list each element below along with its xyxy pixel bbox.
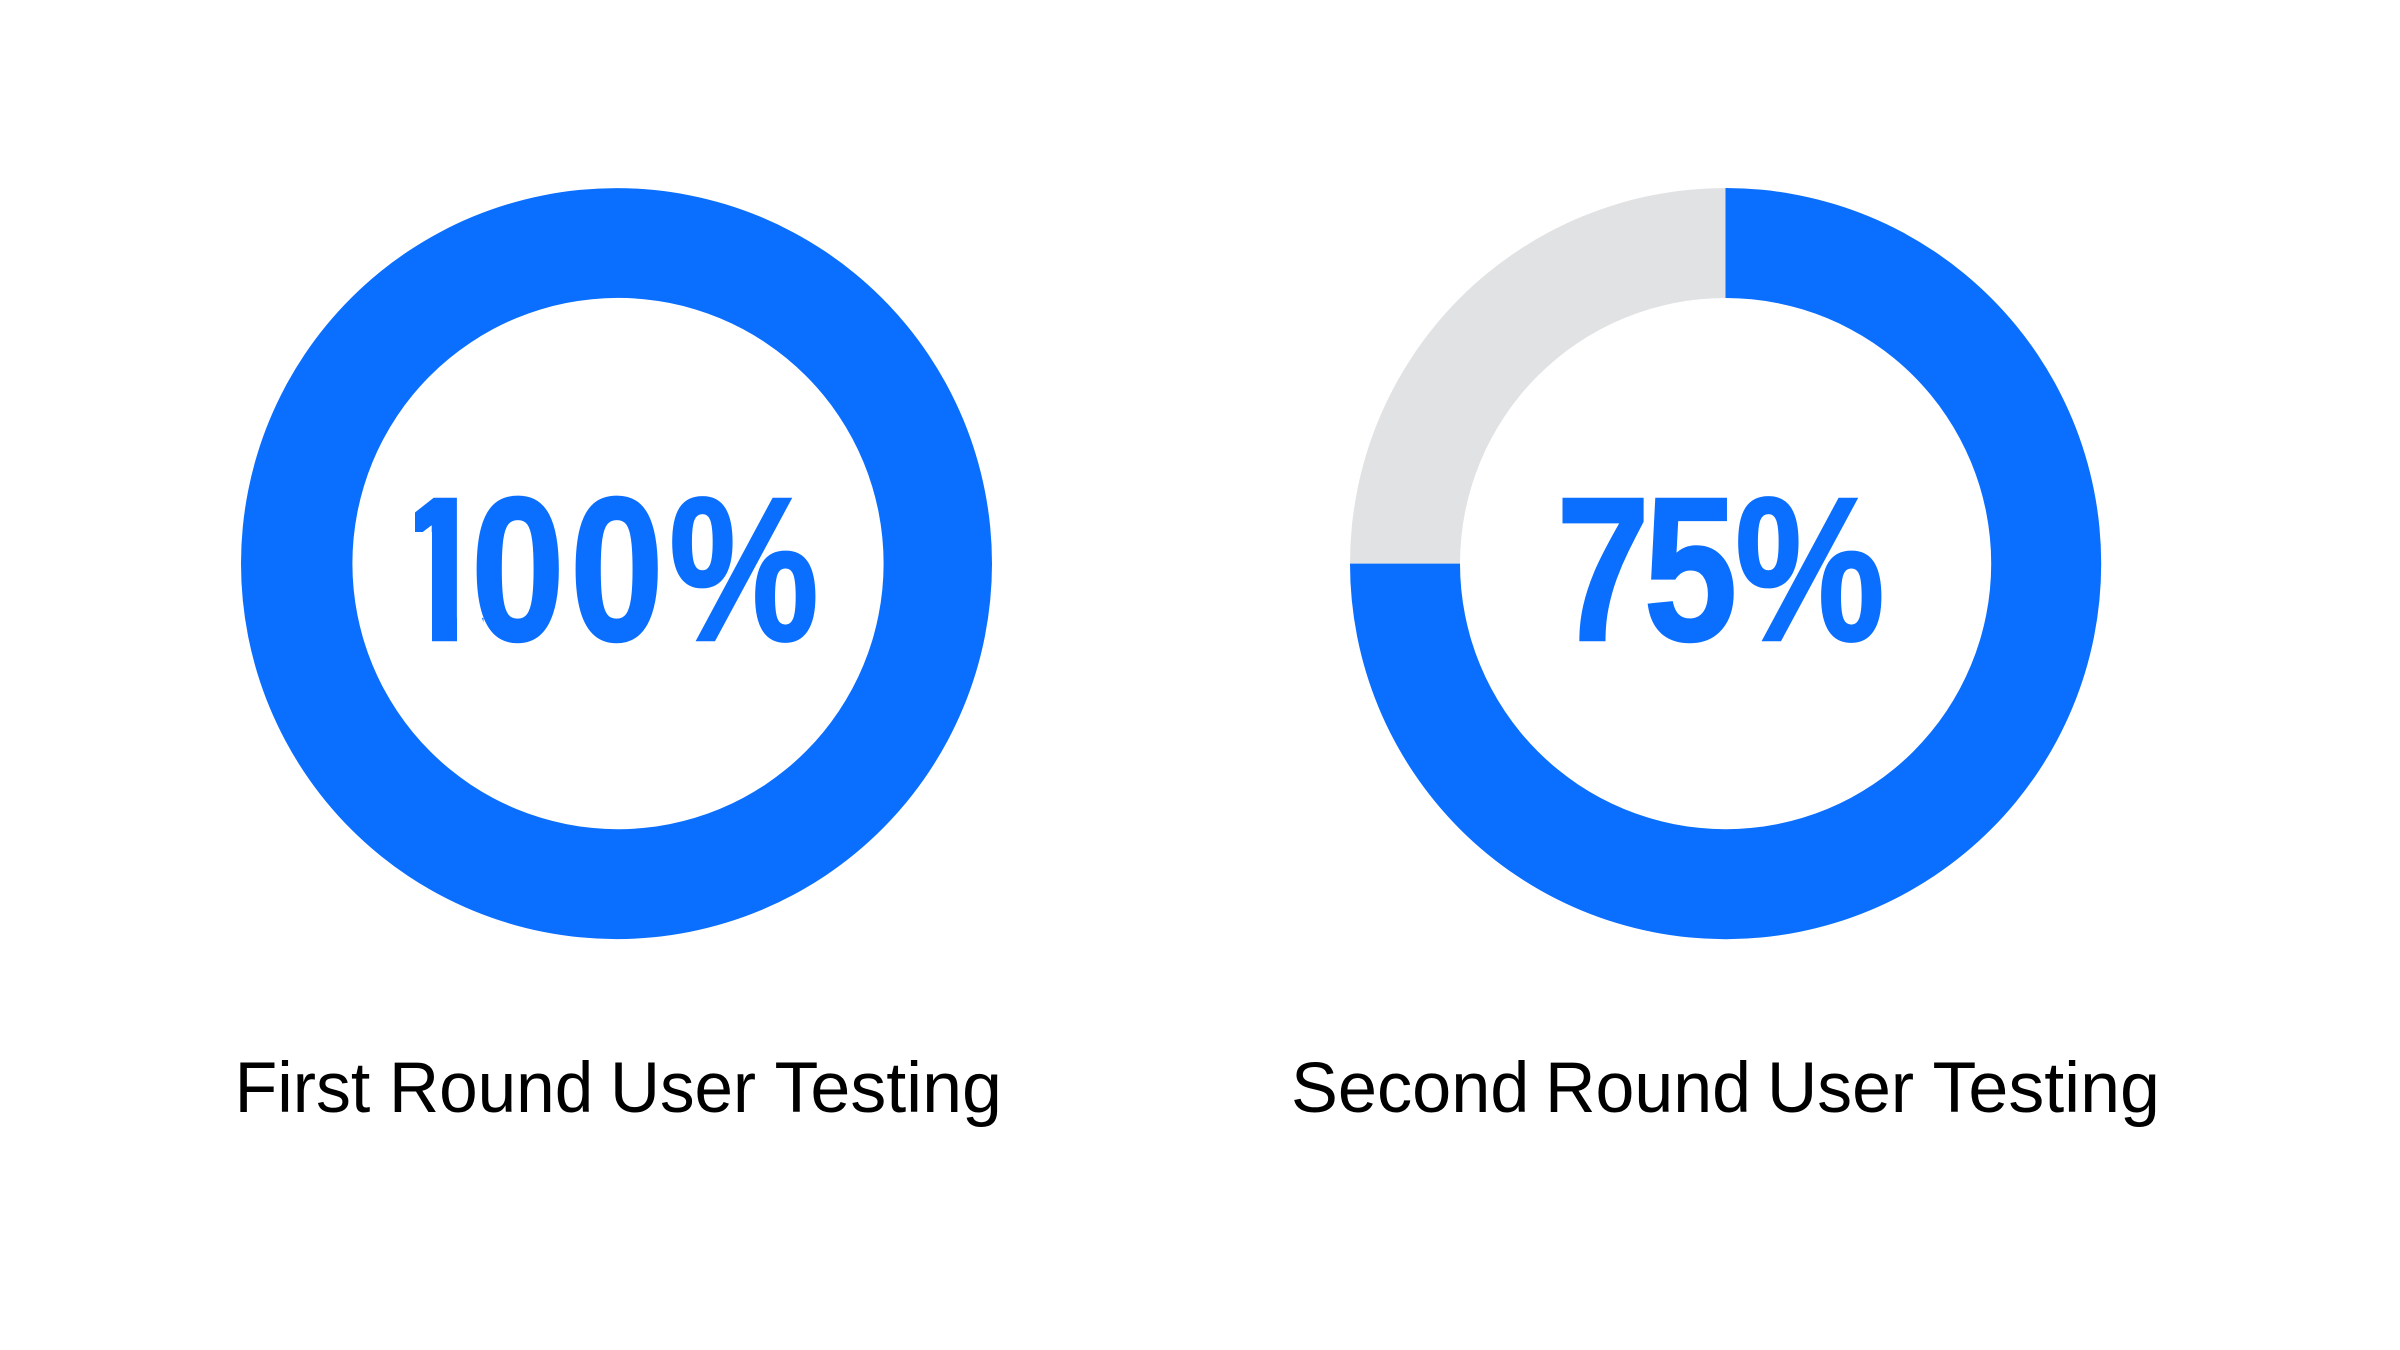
panel: second round donut chart [1350,188,2101,939]
value: 100%: 100% [393,454,819,684]
infographic canvas [240,188,2156,1127]
ring segment: 75 percent [1350,188,2101,939]
value: 75%: 75% [1556,454,1885,684]
label: first round: Round [389,1049,593,1128]
panel: first round donut chart [241,188,992,939]
label: second round: Second [1291,1049,1529,1128]
label: first round: First [235,1049,371,1128]
label: first round: User [610,1049,756,1128]
label: second round: User [1767,1049,1914,1128]
label: first round: Testing [774,1049,1002,1128]
ring segment: remaining 25 percent [1350,188,1726,564]
full ring: 100 percent [241,188,992,939]
label: second round: Round [1545,1049,1751,1128]
label: second round: Testing [1932,1049,2160,1128]
